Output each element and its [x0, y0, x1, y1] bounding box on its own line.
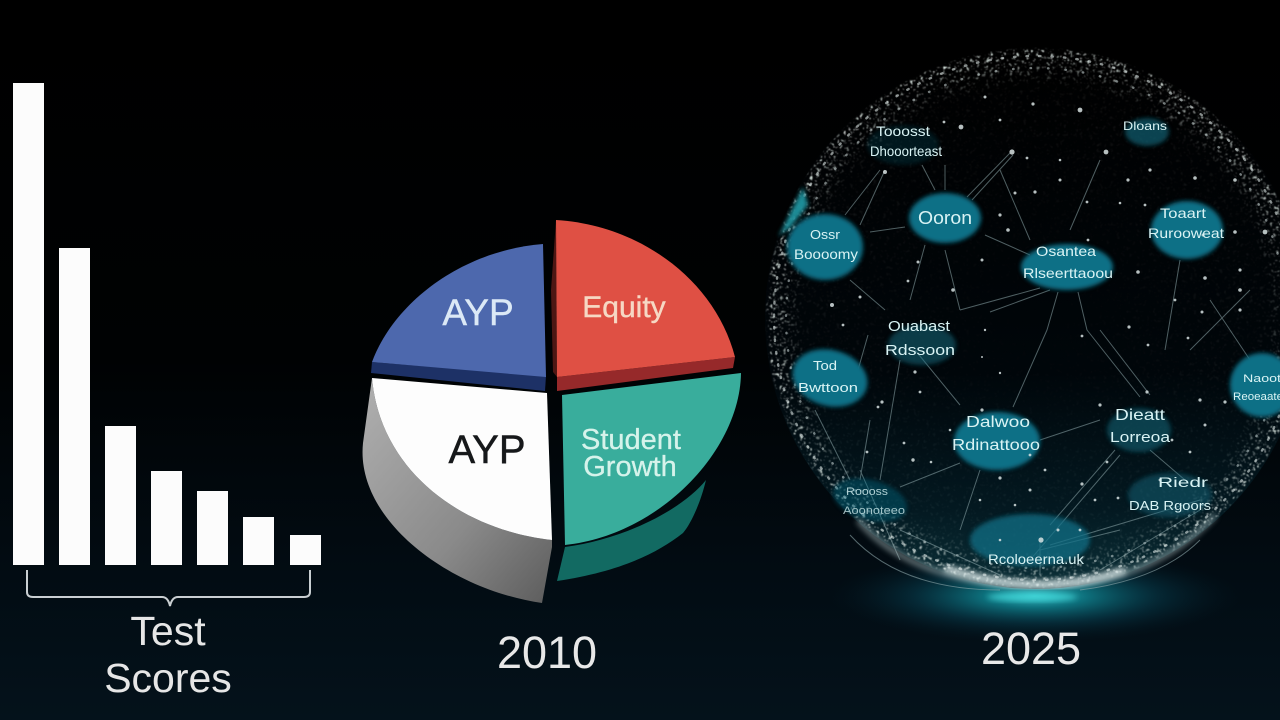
node labels: Naoot: [1243, 373, 1280, 385]
node labels: Rcoloeerna.uk: [988, 551, 1085, 567]
network nodes: [778, 118, 1280, 566]
network dots: [830, 96, 1267, 543]
node labels: Dieatt: [1115, 407, 1166, 424]
node labels: Bwttoon: [798, 380, 858, 395]
node labels: Boooomy: [794, 246, 858, 262]
node labels: Toaart: [1160, 205, 1206, 221]
label: 2025: 2025: [981, 623, 1081, 674]
label: Test Scores: Test: [130, 608, 206, 654]
network links: [815, 153, 1250, 575]
segment: blue AYP: [371, 244, 546, 391]
segment: teal Student Growth: [557, 373, 741, 581]
globe body: [765, 47, 1280, 589]
node labels: Roooss: [846, 486, 889, 498]
node labels: Ossr: [810, 227, 841, 242]
glow under globe: [830, 550, 1240, 642]
node labels: Dalwoo: [966, 414, 1030, 431]
bar chart: test scores: [13, 83, 321, 565]
segment: blue AYP: AYP: [442, 292, 514, 333]
node labels: Rdssoon: [885, 342, 955, 359]
node labels: Rdinattooo: [952, 437, 1040, 454]
node labels: Rurooweat: [1148, 225, 1224, 241]
node labels: Ouabast: [888, 318, 951, 335]
node labels: Riedr: [1158, 474, 1208, 490]
globe speckled rim: [760, 40, 1280, 600]
segment: red Equity: Equity: [582, 291, 666, 324]
network globe: 2025: [760, 40, 1280, 601]
node labels: Tod: [813, 358, 837, 373]
node labels: Rlseerttaoou: [1023, 265, 1113, 281]
segment: white AYP with grey side: [363, 378, 552, 603]
label: 2010: 2010: [497, 627, 597, 678]
label: Test Scores: [104, 608, 232, 701]
segment: teal Student Growth: Student: [581, 424, 681, 456]
pie chart: 2010: [363, 220, 741, 603]
bracket under bars: [27, 570, 310, 606]
node labels: [794, 119, 1280, 567]
node labels: Reoeaate: [1233, 391, 1280, 403]
node labels: Dhooorteast: [870, 143, 942, 159]
segment: white AYP with grey side: AYP: [448, 428, 526, 472]
node labels: Dloans: [1123, 119, 1167, 133]
node labels: Osantea: [1036, 243, 1096, 259]
node labels: Lorreoa: [1110, 429, 1171, 446]
globe bottom rim glow: [850, 515, 1215, 601]
segment: teal Student Growth: Growth: [583, 451, 677, 483]
node labels: Aoonoteeo: [843, 505, 905, 517]
node labels: Tooosst: [876, 123, 930, 139]
label: Test Scores: Scores: [104, 655, 232, 701]
node labels: DAB Rgoors: [1129, 498, 1212, 513]
node labels: Ooron: [918, 208, 972, 228]
segment: red Equity: [551, 220, 735, 391]
